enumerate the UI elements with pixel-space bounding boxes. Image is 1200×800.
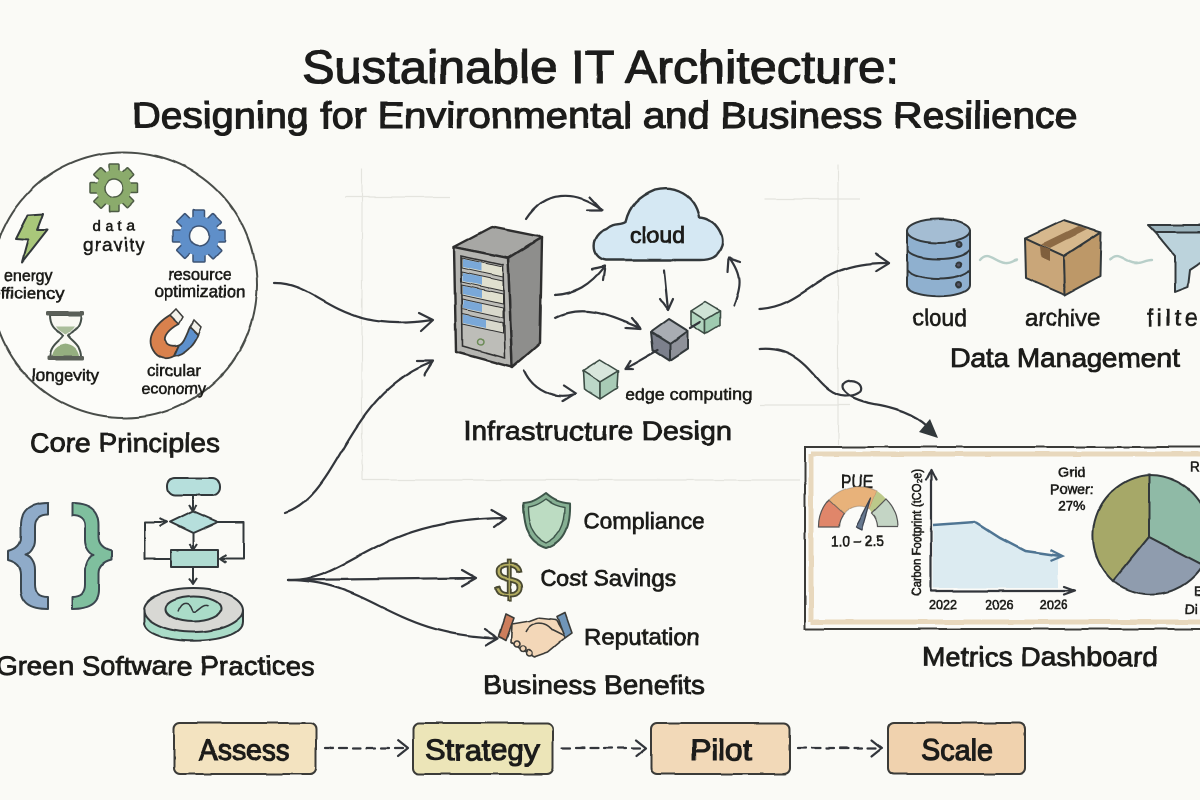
arrow: assess to strategy [325,740,408,756]
icon: grey cube [651,319,688,361]
step: pilot: Pilot [690,734,753,767]
resource optimization label: resource [168,266,232,284]
edge computing label: edge computing [625,385,752,404]
heading: green software practices: Green Software Practices [0,651,315,681]
chart: carbon footprint: 2026 [1040,597,1068,612]
chart: energy source pie: Power: [1050,482,1094,497]
panel: green software practices [8,478,244,641]
chart: carbon footprint [910,469,1075,612]
arrow: pilot to scale [798,740,882,756]
energy efficiency label [0,266,65,303]
icon: shield [523,493,570,548]
arrow: strategy to pilot [562,740,646,756]
title [132,41,1077,136]
arrows: software to business benefits [288,510,506,645]
gauge: PUE [819,472,898,550]
icon: handshake [499,613,572,657]
dashboard frame [805,447,1200,629]
panel: metrics dashboard [805,447,1200,629]
heading: metrics dashboard: Metrics Dashboard [922,642,1158,672]
step: pilot [651,723,790,774]
step: strategy [413,723,553,774]
step: assess: Assess [199,734,290,767]
panel: infrastructure design [454,189,752,404]
panel: business benefits [495,493,705,657]
icon: lightning bolt [16,214,47,262]
principles circle [0,152,257,418]
circular economy label: circular [147,363,202,380]
circular economy label [141,363,206,398]
data labels: cloud [912,305,967,332]
panel: core principles [0,152,257,418]
data gravity label: data [92,218,136,235]
icon: hourglass [46,311,84,360]
icon: green cube upper [691,302,720,334]
heading: core principles: Core Principles [30,428,220,458]
resource optimization label [154,266,246,301]
chart: carbon footprint: 2026 [985,597,1013,612]
process flow [174,723,1025,774]
chart: energy source pie [1050,459,1200,617]
longevity label: longevity [32,367,100,385]
chart: energy source pie: 27% [1058,498,1086,513]
chart: energy source pie: Grid [1058,465,1085,480]
data gravity label: gravity [83,235,145,255]
icon: blue curly brace [8,503,48,609]
heading: business benefits: Business Benefits [483,670,705,700]
icon: database [907,219,970,296]
heading: data management: Data Management [950,343,1181,373]
compliance label: Compliance [583,508,705,534]
icon: green chip disc [144,588,243,641]
energy efficiency label: energy [4,266,53,285]
icon: green curly brace [72,503,112,609]
arrows: cube links [625,322,700,369]
icon: cloud [594,189,723,260]
resource optimization label: optimization [154,283,246,301]
chart: energy source pie: R [1190,459,1200,474]
icon: archive box [1025,220,1101,295]
chart: carbon footprint: Carbon Footprint (tCO₂e) [910,469,924,596]
panel: data management [907,219,1200,332]
cost savings label: Cost Savings [540,565,676,591]
circular economy label: economy [141,381,206,398]
icon: flowchart [145,478,244,584]
data labels: archive [1025,305,1100,332]
reputation label: Reputation [584,624,700,650]
icon: green gear [90,164,138,212]
gauge: PUE: PUE [841,472,873,492]
connector wave [1110,256,1152,263]
step: scale [888,723,1025,774]
connector wave [980,256,1017,263]
step: strategy: Strategy [425,734,540,767]
icon: green cube lower [583,360,618,399]
icon: dollar sign: $ [495,552,523,608]
step: scale: Scale [921,734,993,767]
arrow: software to infrastructure [285,361,433,513]
gauge: PUE: 1.0 – 2.5 [831,533,884,550]
data labels [912,305,1200,332]
icon: magnet [151,309,201,358]
data gravity label [83,218,145,255]
title: Sustainable IT Architecture: [302,41,899,93]
step: assess [174,723,316,774]
arrow: infrastructure to data management [760,254,889,309]
arrow: principles to infrastructure [274,283,433,331]
icon: cloud: cloud [630,222,685,248]
arrows: server and cloud flows [524,196,740,401]
chart: energy source pie: Di [1185,602,1198,617]
icon: blue gear [173,210,225,262]
chart: carbon footprint: 2022 [929,597,957,612]
icon: funnel [1148,225,1200,292]
arrow: infrastructure to metrics dashboard [760,349,938,438]
heading: infrastructure design: Infrastructure Design [463,416,732,446]
title: Designing for Environmental and Business Resilience [132,95,1077,136]
icon: server rack [454,227,542,367]
